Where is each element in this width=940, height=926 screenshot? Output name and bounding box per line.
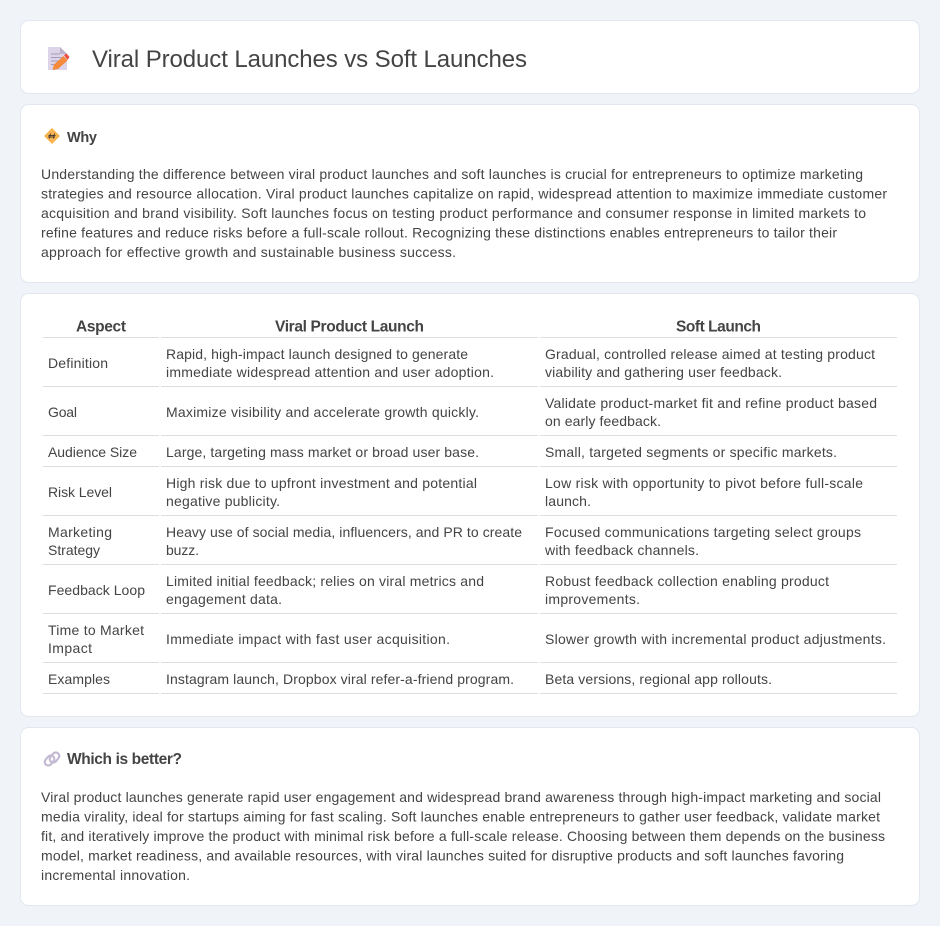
row: risk level xyxy=(43,475,897,516)
row: time to market impact: Impact xyxy=(48,640,92,656)
icon: link xyxy=(43,751,61,767)
row: time to market impact: Time to Market xyxy=(48,622,144,638)
row: audience size: Small, targeted segments or specific markets. xyxy=(545,444,837,460)
row: marketing strategy: buzz. xyxy=(166,542,199,558)
row: definition: immediate widespread attention and user adoption. xyxy=(166,364,494,380)
row: risk level: launch. xyxy=(545,493,591,509)
text block: why paragraph: Understanding the difference between viral product launches and soft launches is crucial for entrepreneurs to optimize marketing xyxy=(41,166,863,182)
icon: warning diamond xyxy=(44,128,60,144)
table header row: Aspect xyxy=(76,318,126,336)
row: risk level: negative publicity. xyxy=(166,493,280,509)
text block: which is better paragraph: Viral product launches generate rapid user engagement and widespread brand awareness through high-impact marketing and social xyxy=(41,789,881,805)
row: marketing strategy xyxy=(43,524,897,565)
text block: which is better paragraph xyxy=(41,789,885,883)
row: time to market impact: Slower growth with incremental product adjustments. xyxy=(545,631,886,647)
row: feedback loop: Limited initial feedback; relies on viral metrics and xyxy=(166,573,484,589)
text block: why paragraph: refine features and reduce risks before a full-scale rollout. Recognizing these distinctions enables entrepreneurs to tailor their xyxy=(41,224,837,240)
row: examples xyxy=(43,671,897,694)
title: Viral Product Launches vs Soft Launches xyxy=(92,46,527,73)
text block: which is better paragraph: media virality, ideal for startups aiming for fast scaling. Soft launches enable entrepreneurs to gather user feedback, validate market xyxy=(41,808,880,824)
text block: why paragraph: acquisition and brand visibility. Soft launches focus on testing product performance and consumer response in limited markets to xyxy=(41,205,866,221)
row: definition: viability and gathering user feedback. xyxy=(545,364,782,380)
row: goal xyxy=(43,395,897,436)
text block: why paragraph xyxy=(41,166,887,260)
row: risk level: Low risk with opportunity to pivot before full-scale xyxy=(545,475,863,491)
row: marketing strategy: Heavy use of social media, influencers, and PR to create xyxy=(166,524,522,540)
row: marketing strategy: with feedback channels. xyxy=(544,542,699,558)
heading: why: Why xyxy=(67,130,97,146)
text block: why paragraph: strategies and resource allocation. Viral product launches capitalize on rapid, widespread attention to maximize immediate customer xyxy=(41,186,887,202)
panel: header xyxy=(20,20,920,94)
row: goal: Validate product-market fit and refine product based xyxy=(545,395,877,411)
row: time to market impact: Immediate impact with fast user acquisition. xyxy=(166,631,450,647)
panel: why xyxy=(20,104,920,282)
row: risk level: Risk Level xyxy=(48,484,112,500)
row: marketing strategy: Strategy xyxy=(48,542,100,558)
row: feedback loop: engagement data. xyxy=(166,591,282,607)
row: definition xyxy=(43,346,897,387)
row: examples: Examples xyxy=(48,671,110,687)
row: feedback loop: Robust feedback collection enabling product xyxy=(545,573,829,589)
row: audience size: Large, targeting mass market or broad user base. xyxy=(166,444,479,460)
row: audience size xyxy=(43,444,897,467)
row: marketing strategy: Focused communications targeting select groups xyxy=(545,524,861,540)
table header row xyxy=(43,318,897,338)
table header row: Soft Launch xyxy=(676,318,761,336)
row: definition: Rapid, high-impact launch designed to generate xyxy=(166,346,468,362)
table header row: Viral Product Launch xyxy=(275,318,424,336)
text block: which is better paragraph: fit, and iteratively improve the product with minimal risk before a full-scale release. Choosing between them depends on the business xyxy=(41,828,885,844)
text block: which is better paragraph: model, market readiness, and available resources, with viral launches suited for disruptive products and soft launches favoring xyxy=(41,848,844,864)
row: audience size: Audience Size xyxy=(48,444,137,460)
icon: memo with pencil xyxy=(48,47,70,70)
row: feedback loop xyxy=(43,573,897,614)
row: goal: on early feedback. xyxy=(545,413,661,429)
row: definition: Definition xyxy=(48,355,108,371)
row: examples: Beta versions, regional app rollouts. xyxy=(545,671,772,687)
row: risk level: High risk due to upfront investment and potential xyxy=(166,475,477,491)
panel: comparison table xyxy=(20,294,920,716)
row: goal: Goal xyxy=(48,404,77,420)
text block: which is better paragraph: incremental innovation. xyxy=(41,867,190,883)
row: definition: Gradual, controlled release aimed at testing product xyxy=(545,346,875,362)
row: feedback loop: improvements. xyxy=(545,591,640,607)
panel: which is better xyxy=(20,728,920,906)
row: feedback loop: Feedback Loop xyxy=(48,582,145,598)
text block: why paragraph: approach for effective growth and sustainable business success. xyxy=(41,244,456,260)
row: marketing strategy: Marketing xyxy=(48,524,112,540)
row: examples: Instagram launch, Dropbox viral refer-a-friend program. xyxy=(166,671,514,687)
row: time to market impact xyxy=(43,622,897,663)
row: goal: Maximize visibility and accelerate growth quickly. xyxy=(166,404,479,420)
heading: which is better: Which is better? xyxy=(67,751,182,768)
